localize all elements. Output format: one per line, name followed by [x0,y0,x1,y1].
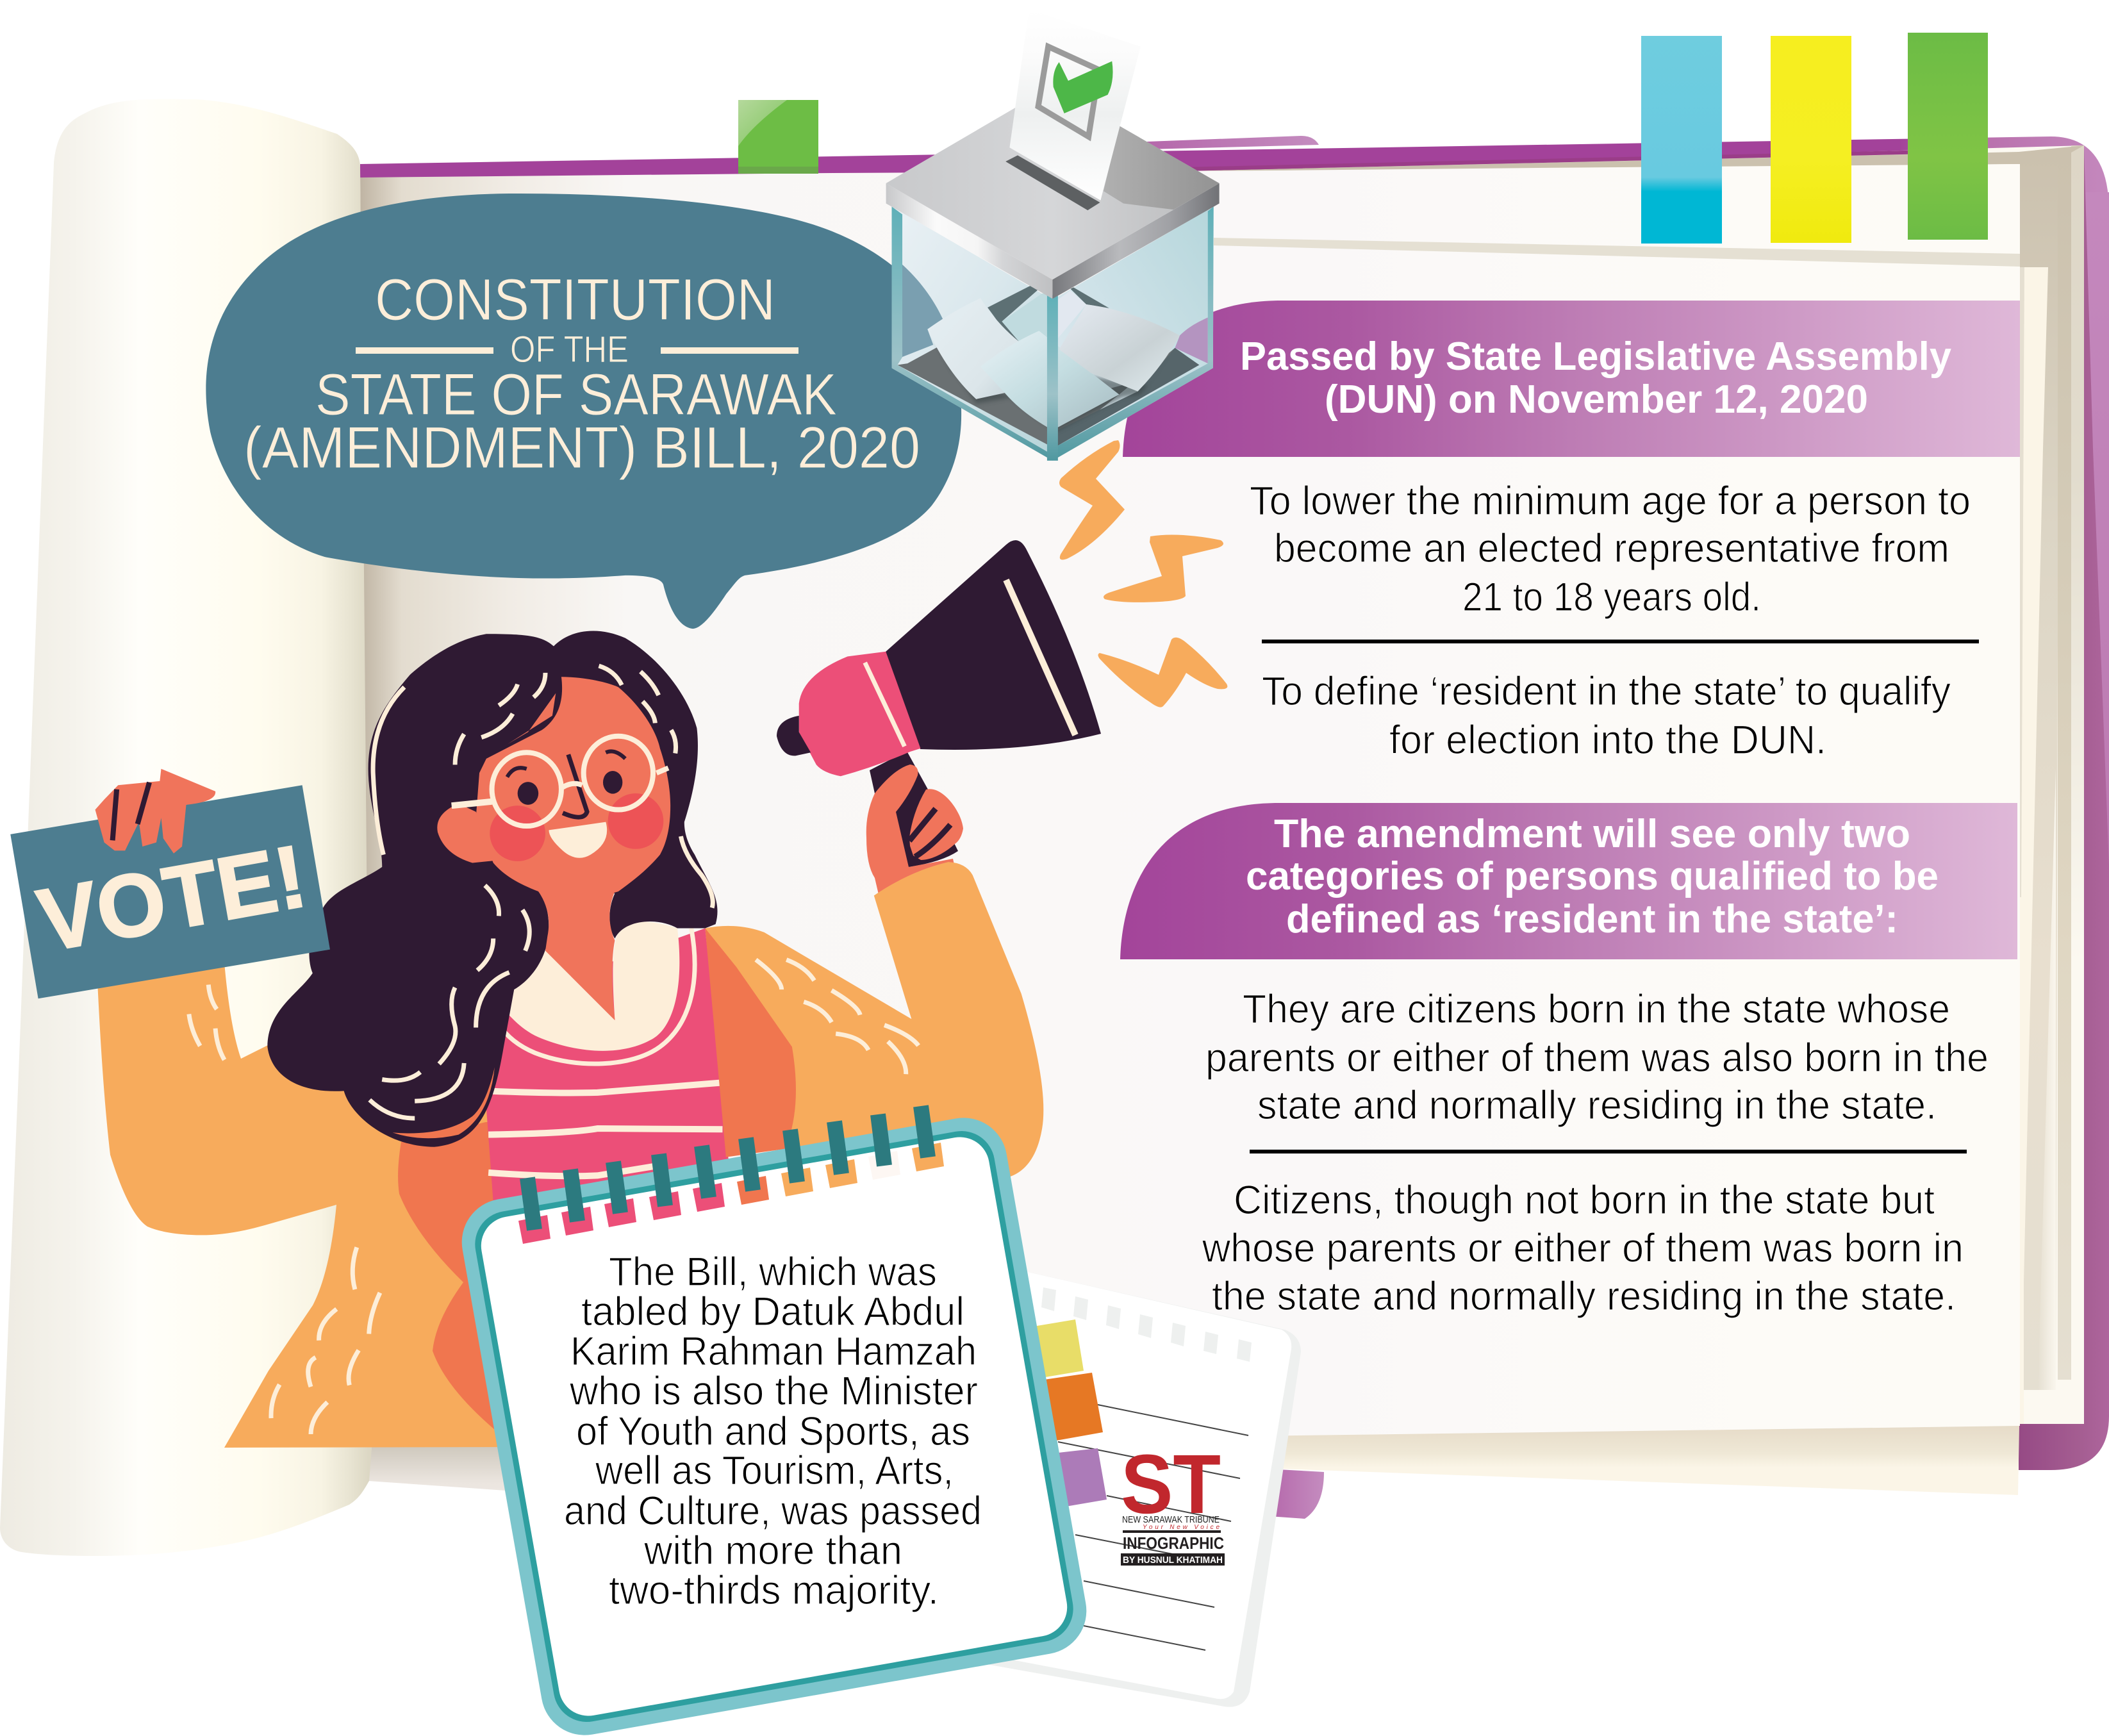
header 1 text: Passed by State Legislative Assembly [1240,335,1952,379]
fingers [909,789,963,860]
text block: lower minimum age and define resident [1250,479,1979,763]
megaphone bell [886,540,1101,750]
right stack top edge beige [1154,145,2084,173]
ballot box [886,10,1220,461]
collar [500,921,679,1051]
New Sarawak Tribune logo: ST [1121,1437,1221,1531]
bubble title: STATE OF SARAWAK [315,362,837,427]
mouth [549,822,607,858]
right bottom page strip [1154,1426,2019,1495]
text block: lower minimum age and define resident: To define ‘resident in the state’ to qualify [1262,669,1951,714]
forearm and thumb [866,765,961,897]
New Sarawak Tribune logo: NEW SARAWAK TRIBUNE [1122,1514,1220,1525]
text block: two categories: parents or either of them was also born in the [1205,1036,1989,1080]
notepad text: well as Tourism, Arts, [595,1448,954,1493]
hair highlights [370,666,713,1118]
notepad frame [455,1111,1093,1736]
ruled lines [1058,1405,1248,1650]
megaphone pink body [799,652,920,776]
ballot checkbox [1038,47,1099,136]
lid top [886,107,1220,279]
face [476,677,670,904]
ballots inside box [927,298,1180,430]
spiral holes [518,1143,944,1244]
page fold band [1214,238,2020,267]
fringe skin sliver [484,693,556,758]
lightning bolt 3 [1098,638,1227,707]
New Sarawak Tribune logo: Your New Voice [1143,1524,1220,1531]
front spiral notepad [455,1106,1093,1736]
spiral rings [527,1106,928,1230]
bubble title: (AMENDMENT) BILL, 2020 [244,415,920,481]
notepad text: The Bill, which was [609,1250,937,1294]
nose [563,754,587,817]
text block: lower minimum age and define resident: for election into the DUN. [1389,718,1826,763]
text block: two categories: the state and normally residing in the state. [1212,1274,1956,1319]
neck [538,891,615,1020]
vote sign text: VOTE! [31,827,313,971]
hair silhouette [267,631,718,1147]
notepad text [564,1250,982,1613]
lower purple tab [1269,1469,1324,1519]
notepad text: of Youth and Sports, as [576,1409,970,1454]
header 1 text: (DUN) on November 12, 2020 [1325,377,1868,422]
megaphone bell stripe [1006,580,1075,735]
back notepad [961,1266,1301,1707]
megaphone stripe [865,663,904,747]
lightning bolt 2 [1104,535,1223,602]
header 2 text: The amendment will see only two [1274,812,1910,856]
lid front right [1052,183,1220,299]
lid shadow [1104,126,1220,210]
cheeks [490,793,663,861]
text block: two categories: state and normally residing in the state. [1257,1083,1937,1128]
sticky tab: green [1908,33,1988,240]
right jacket lapel [705,929,796,1157]
upper body drawn in zoom coordinates [10,631,1043,1202]
sticky tab: small green [738,100,818,174]
header 2 text: defined as ‘resident in the state’: [1286,897,1898,941]
ballot slot [1005,155,1100,210]
header band 1 [1123,301,2020,457]
tank stripes [486,1083,722,1176]
glass frame [892,206,1214,461]
ballot shadows [932,335,1179,432]
sleeve hatch marks [189,960,918,1074]
header 1 text [1240,335,1952,422]
New Sarawak Tribune logo: INFOGRAPHIC [1123,1533,1224,1553]
header 2 text [1246,812,1939,941]
ear [437,804,493,863]
text block: two categories: Citizens, though not born in the state but [1234,1178,1935,1223]
back edges of the box [988,285,1109,367]
New Sarawak Tribune logo: BY HUSNUL KHATIMAH [1123,1555,1223,1566]
text block: lower minimum age and define resident: become an elected representative from [1274,526,1949,571]
text block: two categories [1202,987,1989,1319]
text block: lower minimum age and define resident: To lower the minimum age for a person to [1250,479,1971,524]
header 2 text: categories of persons qualified to be [1246,854,1939,898]
lower jacket hatch marks [271,1247,380,1434]
green check mark [1053,61,1113,113]
cover shadow strip [1154,149,1987,172]
right page stack [1282,145,2084,1424]
header band 2 [1120,803,2017,959]
sticky tab: cyan [1641,36,1722,244]
book cover right edge [2051,192,2109,961]
hair under-strand skin crescent [393,1067,495,1138]
floor front dark right [1057,348,1199,446]
glasses [452,736,668,826]
tank top [486,929,729,1202]
lightning bolt 1 [1059,440,1125,559]
bubble title: OF THE [510,329,629,370]
notepad text: tabled by Datuk Abdul [581,1289,964,1334]
speech bubble [206,194,961,629]
notepad text: Karim Rahman Hamzah [570,1329,977,1374]
right glass wall [1052,206,1214,461]
book cover top band [360,136,2109,269]
text block: lower minimum age and define resident: 21 to 18 years old. [1462,575,1761,620]
hand on sign [95,769,215,854]
perforation marks [1041,1287,1252,1362]
text block: two categories: They are citizens born in the state whose [1243,987,1950,1032]
left glass wall [892,206,1052,461]
coloured index tabs [1025,1319,1107,1508]
notepad text: who is also the Minister [569,1369,978,1414]
box floor [897,342,1198,447]
main page [360,164,2020,1450]
book cover dark lower edge [2019,147,2109,1470]
ballot paper [1009,10,1141,201]
jacket lower lapel [398,1122,513,1430]
right sleeve [705,862,1043,1190]
sticky tab: yellow [1771,36,1851,243]
notepad text: with more than [643,1528,902,1573]
woman with megaphone and vote sign [10,540,1101,1448]
bubble title: CONSTITUTION [375,267,775,333]
vote sign board [10,785,330,998]
eyes [518,771,622,805]
megaphone handle [870,751,958,867]
neckline trim [499,929,695,1064]
text block: two categories: whose parents or either of them was born in [1202,1226,1964,1271]
notepad text: and Culture, was passed [564,1489,982,1533]
jacket left arm and lower body [97,955,513,1448]
bubble title [244,267,920,481]
rolled left page [0,99,372,1556]
left bottom page strip [365,1447,641,1497]
megaphone cap [777,716,811,756]
notepad text: two-thirds majority. [609,1568,939,1613]
lighter cover tab at top [1147,136,1319,149]
lid front left [886,183,1052,299]
eyebrows [507,751,625,777]
